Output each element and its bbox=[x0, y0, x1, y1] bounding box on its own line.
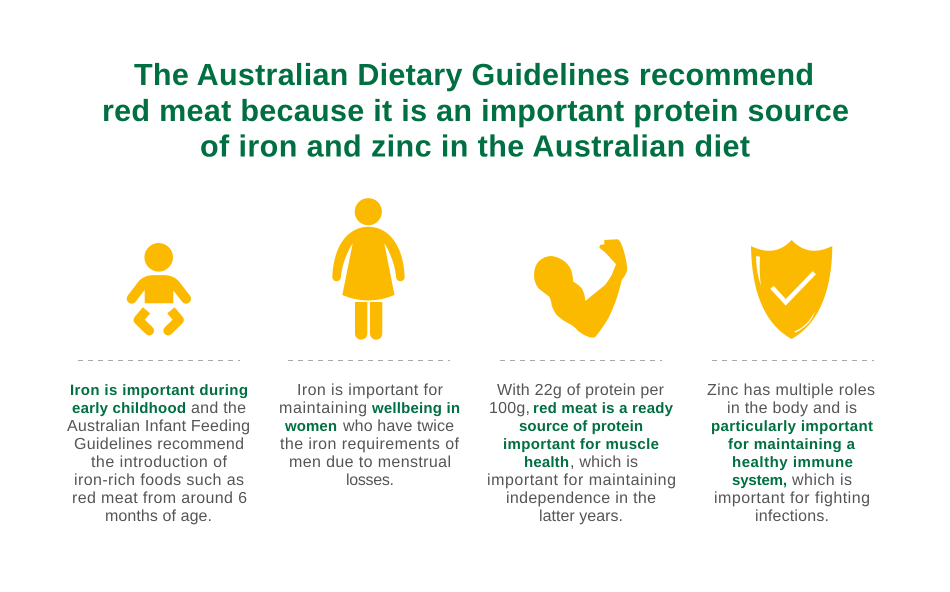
text: early childhood: red meat from around 6 bbox=[72, 490, 247, 507]
text: women: maintaining bbox=[279, 400, 367, 417]
text: muscle health: 100g, bbox=[489, 400, 530, 417]
panel: muscle health bbox=[487, 239, 676, 525]
text: muscle health: independence in the bbox=[506, 490, 656, 507]
text: muscle health: health bbox=[524, 454, 569, 471]
text: early childhood: early childhood bbox=[72, 400, 186, 417]
icon: shield with check bbox=[751, 240, 832, 339]
text: women: women bbox=[284, 418, 337, 435]
panel: early childhood bbox=[67, 243, 250, 525]
text: muscle health: important for muscle bbox=[503, 436, 659, 453]
text: immune system: Zinc has multiple roles bbox=[707, 382, 875, 399]
text: early childhood: Guidelines recommend bbox=[74, 436, 244, 453]
text: women: men due to menstrual bbox=[289, 454, 451, 471]
icon: flexed arm bbox=[534, 239, 627, 338]
text: muscle health: red meat is a ready bbox=[533, 400, 674, 417]
text: immune system: system, bbox=[732, 472, 787, 489]
text: women: losses. bbox=[346, 472, 394, 489]
text: early childhood: and the bbox=[191, 400, 246, 417]
text: women: who have twice bbox=[342, 418, 454, 435]
text: early childhood: Iron is important during bbox=[70, 382, 248, 399]
text: muscle health: source of protein bbox=[519, 418, 643, 435]
text: muscle health: latter years. bbox=[539, 508, 623, 525]
text: immune system: which is bbox=[791, 472, 852, 489]
icon: woman bbox=[332, 198, 405, 340]
text: muscle health: With 22g of protein per bbox=[497, 382, 665, 399]
text: women: Iron is important for bbox=[297, 382, 444, 399]
text: early childhood: the introduction of bbox=[91, 454, 228, 471]
text: immune system: particularly important bbox=[711, 418, 873, 435]
text: immune system: infections. bbox=[755, 508, 829, 525]
title: red meat because it is an important protein source bbox=[102, 94, 849, 128]
text: women bbox=[279, 382, 460, 489]
title: The Australian Dietary Guidelines recommend bbox=[134, 58, 814, 92]
text: women: wellbeing in bbox=[371, 400, 460, 417]
text: early childhood: months of age. bbox=[105, 508, 212, 525]
panel: women bbox=[279, 198, 460, 489]
title bbox=[102, 58, 849, 164]
text: women: the iron requirements of bbox=[280, 436, 460, 453]
text: immune system: important for fighting bbox=[714, 490, 870, 507]
text: immune system bbox=[707, 382, 875, 525]
text: muscle health: , which is bbox=[570, 454, 638, 471]
title: of iron and zinc in the Australian diet bbox=[200, 130, 750, 164]
text: early childhood: Australian Infant Feeding bbox=[67, 418, 250, 435]
icon: baby bbox=[132, 243, 186, 335]
text: early childhood bbox=[67, 382, 250, 525]
text: muscle health: important for maintaining bbox=[487, 472, 676, 489]
text: immune system: healthy immune bbox=[732, 454, 853, 471]
text: immune system: for maintaining a bbox=[728, 436, 856, 453]
text: early childhood: iron-rich foods such as bbox=[74, 472, 244, 489]
panel: immune system bbox=[707, 240, 875, 525]
text: muscle health bbox=[487, 382, 676, 525]
text: immune system: in the body and is bbox=[727, 400, 857, 417]
